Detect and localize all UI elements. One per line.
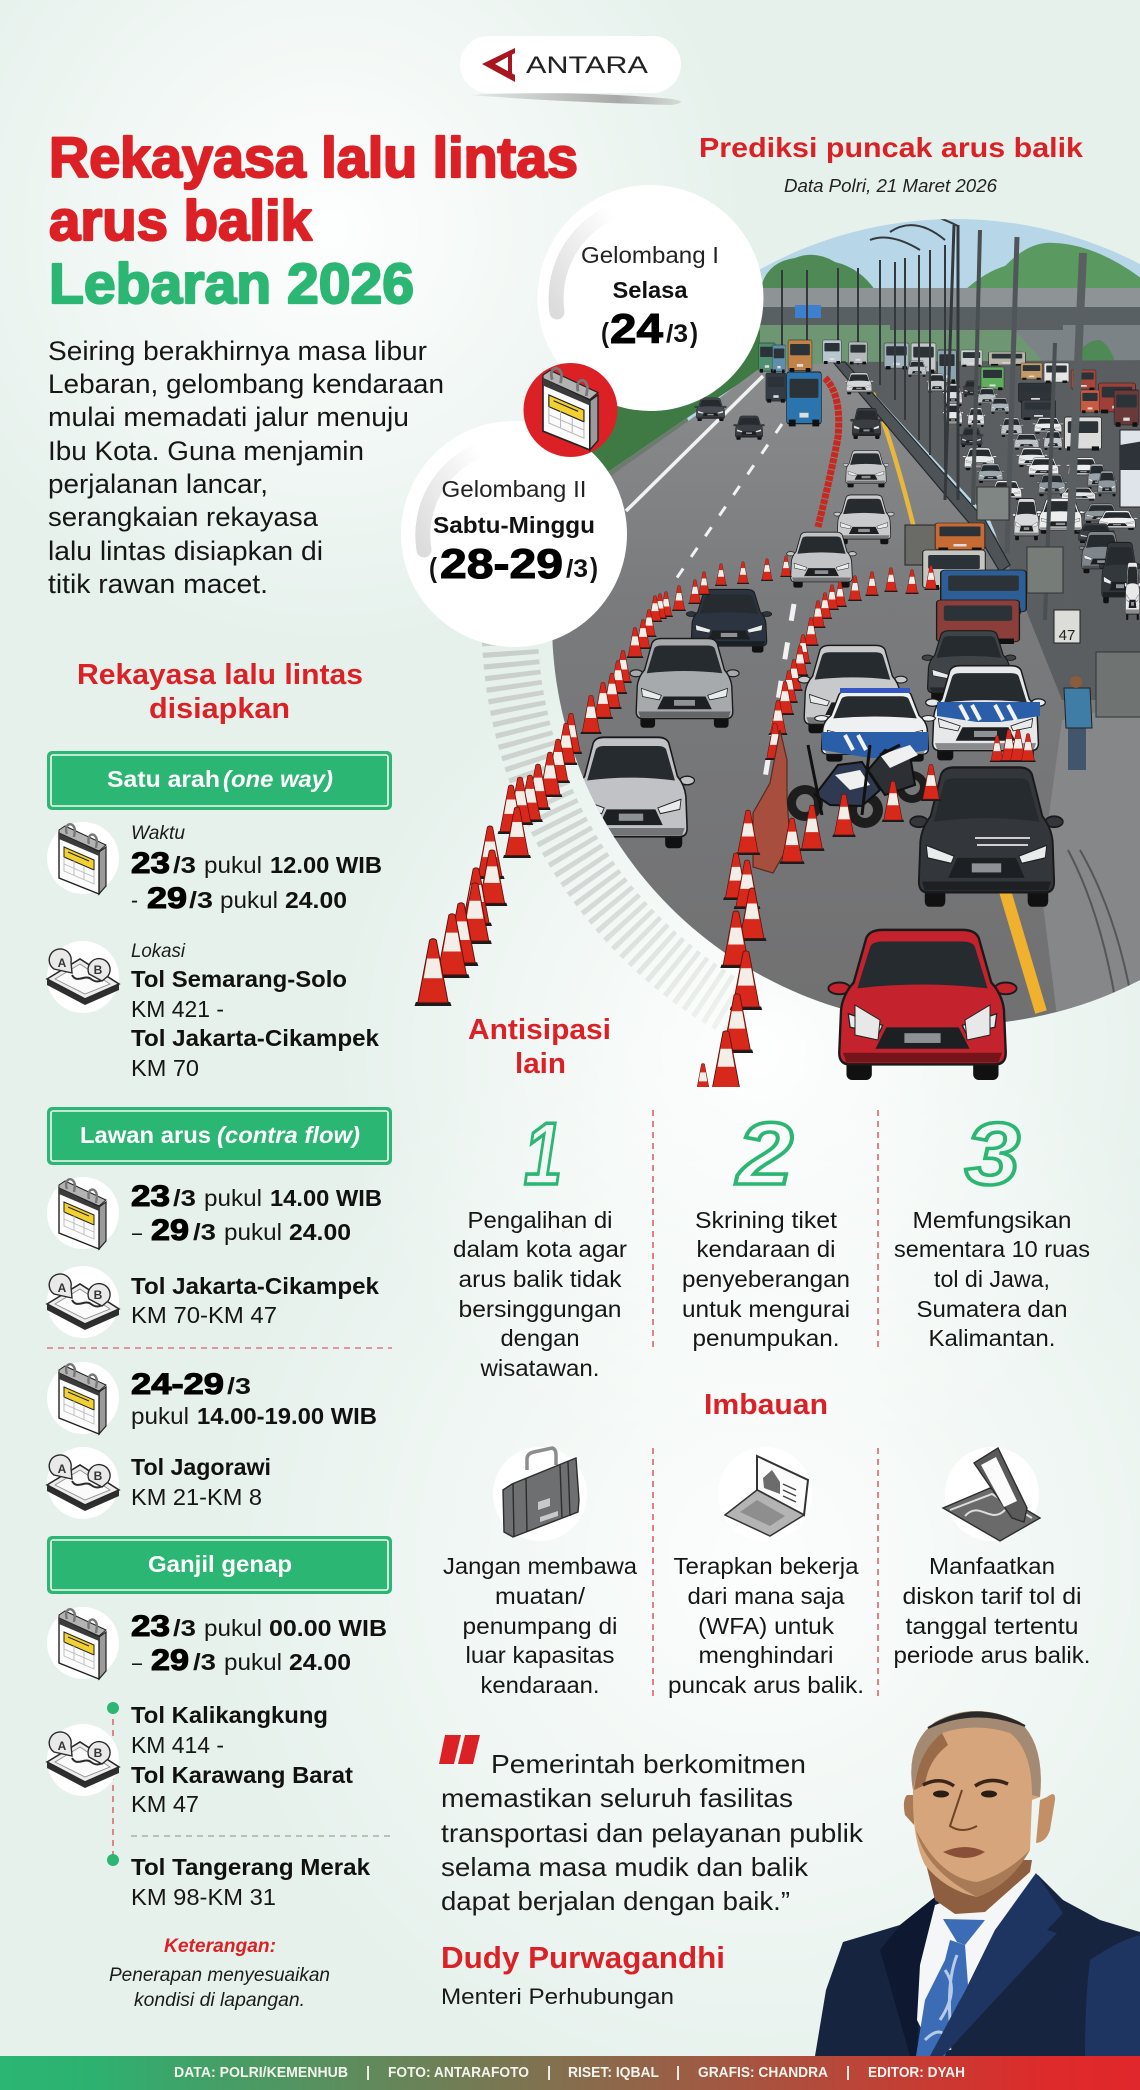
waktu text: –: [132, 1649, 142, 1675]
waktu text 1: 14.00 WIB: [270, 1185, 382, 1211]
bubble: gelombang I: Gelombang I: [581, 242, 719, 268]
footer credits: |: [366, 2065, 370, 2081]
heading: antisipasi lain: [468, 1014, 611, 1080]
bubble: gelombang II: ): [590, 552, 598, 583]
red car foreground: [828, 930, 1017, 1080]
item 1: dengan: [500, 1325, 580, 1351]
waktu text 1: [131, 1180, 382, 1247]
waktu text: 24.00: [285, 887, 347, 913]
lokasi text: [131, 1702, 370, 1910]
icon: suitcase: [493, 1447, 587, 1541]
label: satu arah: (one way): [223, 766, 333, 792]
panels and highway km sign: 47: [1059, 627, 1075, 644]
lokasi text 2: [131, 1454, 271, 1510]
label: ganjil genap: [47, 1536, 392, 1594]
concrete barrier: [833, 362, 1010, 572]
imbauan text 1: muatan/: [495, 1583, 586, 1609]
quote attribution: Menteri Perhubungan: [441, 1984, 674, 2009]
intro paragraph: Seiring berakhirnya masa libur: [48, 336, 427, 366]
cars mid: [630, 589, 1045, 762]
waktu text 1: /3: [193, 1219, 216, 1245]
icon: calendar: [47, 822, 119, 894]
imbauan text 3: diskon tarif tol di: [902, 1583, 1082, 1609]
panel: lawan arus: [47, 1107, 392, 1519]
waktu text: pukul: [224, 1649, 282, 1675]
barrier: [753, 730, 790, 873]
heading: prediksi puncak: Data Polri, 21 Maret 2026: [784, 176, 998, 196]
icon: calendar: [47, 1607, 119, 1679]
note: keterangan: Keterangan:: [164, 1936, 276, 1957]
note: keterangan: Penerapan menyesuaikan: [109, 1965, 330, 1986]
traffic jam on right carriageway: [884, 343, 1140, 620]
imbauan text 1: Jangan membawa: [443, 1553, 637, 1579]
item 2: untuk mengurai: [682, 1296, 850, 1322]
imbauan text 2: menghindari: [698, 1642, 834, 1668]
cones: left string: [415, 556, 792, 1006]
item 2: 2: [735, 1104, 793, 1203]
title: Lebaran 2026: [49, 252, 414, 316]
lokasi text: Tol Tangerang Merak: [131, 1854, 370, 1880]
heading: prediksi puncak: Prediksi puncak arus balik: [699, 132, 1083, 163]
icon: calendar on red circle: [524, 363, 618, 457]
heading: imbauan: Imbauan: [704, 1389, 828, 1421]
quote mark: [439, 1735, 480, 1764]
icon: calendar: [47, 1362, 119, 1434]
heading: rekayasa disiapkan: [77, 659, 363, 725]
item 2: penumpukan.: [692, 1325, 840, 1351]
intro paragraph: lalu lintas disiapkan di: [48, 536, 323, 566]
waktu text: 23: [131, 847, 170, 880]
title: Rekayasa lalu lintas: [49, 126, 578, 190]
worker: [1064, 676, 1092, 770]
icon: map route: A: [58, 956, 67, 970]
heading: antisipasi lain: Antisipasi: [468, 1014, 611, 1046]
item 2: kendaraan di: [696, 1236, 836, 1262]
waktu text 1: pukul: [204, 1185, 262, 1211]
lane cones mid: [765, 566, 938, 760]
icon: map route: [47, 1724, 119, 1796]
label: lawan arus: (contra flow): [217, 1122, 360, 1148]
bubble: gelombang I: (: [601, 317, 610, 348]
waktu text 2: /3: [227, 1373, 251, 1399]
waktu text 1: –: [132, 1219, 142, 1245]
lokasi text 1: [131, 1273, 379, 1328]
waktu text: /3: [189, 887, 213, 913]
lokasi text: KM 414 -: [131, 1732, 224, 1758]
icon: map route: A: [58, 1739, 67, 1753]
item 2: [682, 1104, 850, 1351]
intro paragraph: [48, 336, 444, 599]
intro paragraph: serangkaian rekayasa: [48, 502, 318, 532]
illustration: traffic on toll road: [552, 219, 1140, 1022]
footer credits: DATA: POLRI/KEMENHUB: [174, 2065, 348, 2081]
lokasi text: [131, 941, 379, 1081]
waktu text 2: 24-29: [131, 1368, 224, 1401]
panel: satu arah: [47, 751, 392, 1081]
quote: memastikan seluruh fasilitas: [441, 1783, 793, 1813]
heading: rekayasa disiapkan: disiapkan: [149, 693, 290, 725]
footer credits: |: [846, 2065, 850, 2081]
imbauan text 2: dari mana saja: [688, 1583, 845, 1609]
imbauan text 3: periode arus balik.: [894, 1642, 1090, 1668]
footer credits: |: [676, 2065, 680, 2081]
bubble: gelombang II: Gelombang II: [442, 476, 586, 502]
panel: antisipasi items: [453, 1104, 1090, 1381]
title: [49, 126, 578, 316]
item 2: penyeberangan: [682, 1266, 850, 1292]
label: lawan arus: Lawan arus: [80, 1122, 211, 1148]
icon: map route: A: [58, 1462, 67, 1476]
imbauan text 2: (WFA) untuk: [698, 1613, 835, 1639]
label: satu arah: Satu arah: [107, 766, 220, 792]
label: ganjil genap: Ganjil genap: [148, 1551, 292, 1577]
lokasi text: Tol Semarang-Solo: [131, 966, 347, 992]
item 2: Skrining tiket: [695, 1207, 838, 1233]
icon: map route: A: [58, 1281, 67, 1295]
footer credits: GRAFIS: CHANDRA: [698, 2065, 829, 2081]
lokasi text 2: KM 21-KM 8: [131, 1484, 262, 1510]
quote: Pemerintah berkomitmen: [491, 1749, 806, 1779]
quote attribution: [441, 1940, 725, 2009]
bubble: gelombang II: [401, 421, 627, 647]
icon: map route: [47, 1447, 119, 1519]
lamp poles: [782, 210, 1083, 620]
lokasi text: KM 98-KM 31: [131, 1884, 276, 1910]
icon: laptop: [718, 1447, 812, 1541]
imbauan text 1: kendaraan.: [480, 1672, 600, 1698]
imbauan text 2: puncak arus balik.: [668, 1672, 864, 1698]
lokasi text 1: KM 70-KM 47: [131, 1302, 277, 1328]
waktu text: [131, 823, 382, 915]
note: keterangan: kondisi di lapangan.: [134, 1990, 305, 2011]
waktu text: Waktu: [131, 823, 185, 844]
quote: dapat berjalan dengan baik.”: [441, 1886, 790, 1916]
waktu text 1: 23: [131, 1180, 170, 1213]
footer credits: |: [547, 2065, 551, 2081]
far traffic on left carriageway: [694, 340, 894, 588]
waktu text: 29: [151, 1644, 189, 1677]
panels and highway km sign: [977, 487, 1140, 717]
lokasi text: KM 70: [131, 1055, 199, 1081]
waktu text 2: [131, 1368, 377, 1429]
far cone line: [818, 378, 839, 527]
item 3: 3: [965, 1104, 1020, 1203]
intro paragraph: perjalanan lancar,: [48, 469, 268, 499]
waktu text: [131, 1610, 387, 1677]
waktu text 1: pukul: [224, 1219, 282, 1245]
timeline dots: [107, 1702, 119, 1866]
lokasi text: Lokasi: [131, 941, 186, 962]
imbauan text 1: penumpang di: [462, 1613, 618, 1639]
waktu text 1: 24.00: [289, 1219, 351, 1245]
lokasi text: Tol Jakarta-Cikampek: [131, 1025, 379, 1051]
item 1: 1: [524, 1104, 562, 1203]
item 1: arus balik tidak: [458, 1266, 622, 1292]
icon: phone on toll: [943, 1447, 1040, 1541]
logo: ANTARA: [460, 36, 681, 105]
footer credits: [0, 2056, 1140, 2090]
item 3: sementara 10 ruas: [894, 1236, 1090, 1262]
intro paragraph: Ibu Kota. Guna menjamin: [48, 436, 364, 466]
panel: imbauan items: [443, 1447, 1090, 1701]
imbauan text 3: Manfaatkan: [929, 1553, 1055, 1579]
motorcycles: [787, 745, 928, 828]
waktu text 1: /3: [173, 1185, 196, 1211]
lokasi text: Tol Kalikangkung: [131, 1702, 328, 1728]
waktu text: 24.00: [289, 1649, 351, 1675]
cones: central string: [696, 810, 766, 1087]
bubble: gelombang II: (: [429, 552, 438, 583]
icon: map route: B: [94, 1746, 103, 1760]
waktu text 1: 29: [151, 1214, 189, 1247]
bubble: gelombang II: 28-29: [440, 540, 563, 587]
item 3: [894, 1104, 1090, 1351]
waktu text: pukul: [220, 887, 278, 913]
intro paragraph: mulai memadati jalur menuju: [48, 402, 409, 432]
bubble: gelombang II: /3: [566, 555, 588, 583]
item 1: wisatawan.: [479, 1355, 600, 1381]
waktu text: pukul: [204, 852, 262, 878]
icon: map route: [47, 941, 119, 1013]
imbauan text 2: Terapkan bekerja: [674, 1553, 859, 1579]
label: lawan arus: [47, 1107, 392, 1165]
footer credits: RISET: IQBAL: [568, 2065, 659, 2081]
road markings: [626, 376, 1041, 1012]
imbauan text 1: [443, 1553, 637, 1698]
trucks on shoulder: [905, 523, 1026, 700]
bubble: gelombang I: [538, 185, 764, 411]
logo: ANTARA: ANTARA: [526, 52, 648, 79]
imbauan text 2: [668, 1553, 864, 1698]
intro paragraph: Lebaran, gelombang kendaraan: [48, 369, 444, 399]
item 3: Sumatera dan: [916, 1296, 1068, 1322]
panel: ganjil genap: [47, 1536, 392, 1910]
item 3: tol di Jawa,: [934, 1266, 1050, 1292]
imbauan text 3: tanggal tertentu: [906, 1613, 1078, 1639]
label: satu arah: [47, 751, 392, 810]
heading: prediksi puncak: [699, 132, 1083, 196]
item 1: bersinggungan: [458, 1296, 622, 1322]
waktu text: /3: [193, 1649, 216, 1675]
item 1: Pengalihan di: [468, 1207, 612, 1233]
footer credits: EDITOR: DYAH: [868, 2065, 965, 2081]
icon: map route: B: [94, 963, 103, 977]
icon: map route: B: [94, 1469, 103, 1483]
icon: map route: [47, 1266, 119, 1338]
bubble: gelombang II: Sabtu-Minggu: [433, 512, 595, 538]
lokasi text: Tol Karawang Barat: [131, 1762, 353, 1788]
quote: transportasi dan pelayanan publik: [441, 1818, 864, 1848]
waktu text: 29: [147, 882, 187, 915]
waktu text: -: [131, 887, 138, 913]
bubble: gelombang I: /3: [666, 320, 688, 348]
hatched arc: [510, 640, 746, 1015]
waktu text: 23: [131, 1610, 170, 1643]
item 3: Memfungsikan: [912, 1207, 1072, 1233]
lokasi text 1: Tol Jakarta-Cikampek: [131, 1273, 379, 1299]
bubble: gelombang I: 24: [610, 305, 664, 352]
lokasi text 2: Tol Jagorawi: [131, 1454, 271, 1480]
footer credits: FOTO: ANTARAFOTO: [388, 2065, 529, 2081]
imbauan text 1: luar kapasitas: [466, 1642, 614, 1668]
waktu text: /3: [173, 1615, 196, 1641]
waktu text: 00.00 WIB: [269, 1615, 387, 1641]
intro paragraph: titik rawan macet.: [48, 569, 268, 599]
quote: [439, 1735, 864, 1916]
waktu text: 12.00 WIB: [270, 852, 382, 878]
lokasi text: KM 421 -: [131, 996, 224, 1022]
bubble: gelombang I: Selasa: [612, 277, 688, 303]
bubble: gelombang I: ): [690, 317, 698, 348]
item 3: Kalimantan.: [928, 1325, 1056, 1351]
icon: calendar: [47, 1177, 119, 1249]
heading: antisipasi lain: lain: [515, 1048, 566, 1080]
heading: rekayasa disiapkan: Rekayasa lalu lintas: [77, 659, 363, 691]
waktu text 2: pukul: [131, 1403, 189, 1429]
item 1: [453, 1104, 627, 1381]
foreground cones inside lane: [779, 764, 941, 864]
near cars: [568, 729, 1063, 907]
quote: selama masa mudik dan balik: [441, 1852, 809, 1882]
portrait: minister: [815, 1711, 1140, 2056]
title: arus balik: [49, 189, 312, 253]
quote attribution: Dudy Purwagandhi: [441, 1940, 725, 1975]
imbauan text 3: [894, 1553, 1090, 1668]
lokasi text: KM 47: [131, 1791, 199, 1817]
item 1: dalam kota agar: [453, 1236, 627, 1262]
waktu text 2: 14.00-19.00 WIB: [197, 1403, 377, 1429]
note: keterangan: [109, 1936, 330, 2011]
icon: map route: B: [94, 1288, 103, 1302]
waktu text: /3: [173, 852, 196, 878]
waktu text: pukul: [204, 1615, 262, 1641]
